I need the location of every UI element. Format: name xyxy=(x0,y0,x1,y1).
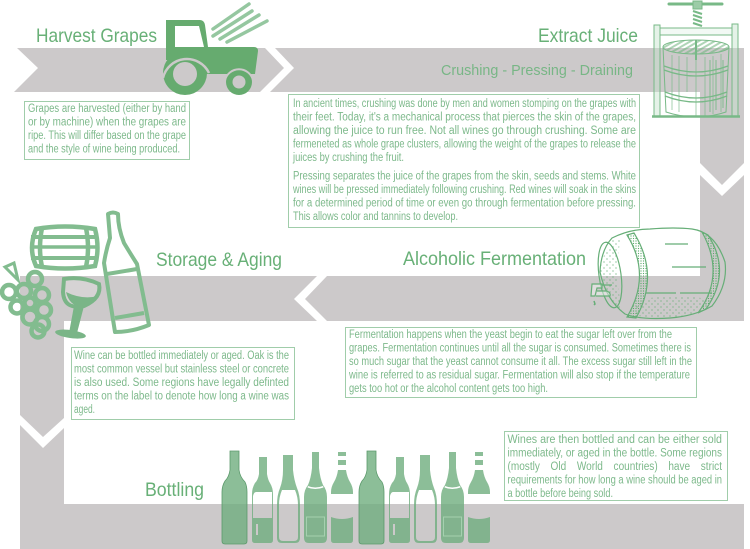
subheading: crushing pressing draining: Crushing - Pressing - Draining xyxy=(441,62,633,79)
text box: storage: is also used. Some regions have legally definted xyxy=(74,377,289,389)
text box: harvest: Grapes are harvested (either by hand xyxy=(28,103,186,115)
text box: storage xyxy=(72,348,294,420)
text box: bottling xyxy=(504,432,728,500)
text box: extract juice: juices by crushing the fruit. xyxy=(292,152,404,164)
text box: extract juice: wines will be pressed immediately following crushing. Red wines will soak in the skins xyxy=(292,184,636,196)
text box: extract juice: allowing the juice to run free. Not all wines go through crushing. Some are xyxy=(293,125,636,137)
text box: fermentation xyxy=(346,328,696,398)
text box: extract juice: fermeneted as whole grape clusters, allowing the weight of the grapes to release the xyxy=(293,138,636,150)
text box: extract juice: for a determined period of time or even go through fermentation before pressing. xyxy=(293,198,636,210)
text box: harvest: and the style of wine being produced. xyxy=(28,144,180,156)
heading: Harvest Grapes: Harvest Grapes xyxy=(36,25,157,47)
icon: grapes xyxy=(2,263,51,338)
icon: fermentation barrel xyxy=(591,228,725,318)
text box: fermentation: gets too hot or the alcohol content gets too high. xyxy=(349,383,548,395)
text box: bottling: immediately, or aged in the bottle. Some regions xyxy=(508,448,722,460)
heading: Bottling: Bottling xyxy=(145,479,204,501)
text box: extract juice: This allows color and tannins to develop. xyxy=(293,211,458,223)
text box: storage: terms on the label to denote how long a wine was xyxy=(74,390,289,402)
text box: harvest: ripe. This will differ based on the grape xyxy=(28,130,186,142)
text box: extract juice: Pressing separates the juice of the grapes from the skin, seeds and stems. White xyxy=(293,170,636,182)
heading: Storage and Aging: Storage & Aging xyxy=(156,249,282,271)
text box: extract juice: their feet. Today, it's a mechanical process that pierces the skin of the grapes, xyxy=(293,112,636,124)
icon: storage barrel xyxy=(30,226,98,268)
text box: fermentation: Fermentation happens when the yeast begin to eat the sugar left over from the xyxy=(349,329,672,341)
text box: storage: Wine can be bottled immediately or aged. Oak is the xyxy=(74,350,289,362)
icon: wine press xyxy=(652,1,740,117)
icon: wine glass xyxy=(55,278,99,340)
text box: storage: most common vessel but stainless steel or concrete xyxy=(74,364,289,376)
heading: Extract Juice: Extract Juice xyxy=(538,25,638,47)
illustration: row of wine bottles xyxy=(222,451,490,544)
text box: bottling: Wines are then bottled and can be either sold xyxy=(508,434,722,446)
heading: Alcoholic Fermentation: Alcoholic Fermentation xyxy=(403,248,586,270)
icon: tractor xyxy=(163,4,267,95)
text box: bottling: (mostly Old World countries) have strict xyxy=(508,461,723,473)
text box: extract juice: In ancient times, crushing was done by men and women stomping on the grapes with xyxy=(293,98,636,110)
text box: harvest: or by machine) when the grapes are xyxy=(28,116,186,128)
text box: bottling: a bottle before being sold. xyxy=(508,488,613,500)
icon: wine bottle xyxy=(104,212,149,332)
text box: extract juice xyxy=(288,94,640,228)
text box: storage: aged. xyxy=(74,404,95,416)
text box: harvest xyxy=(24,102,190,160)
